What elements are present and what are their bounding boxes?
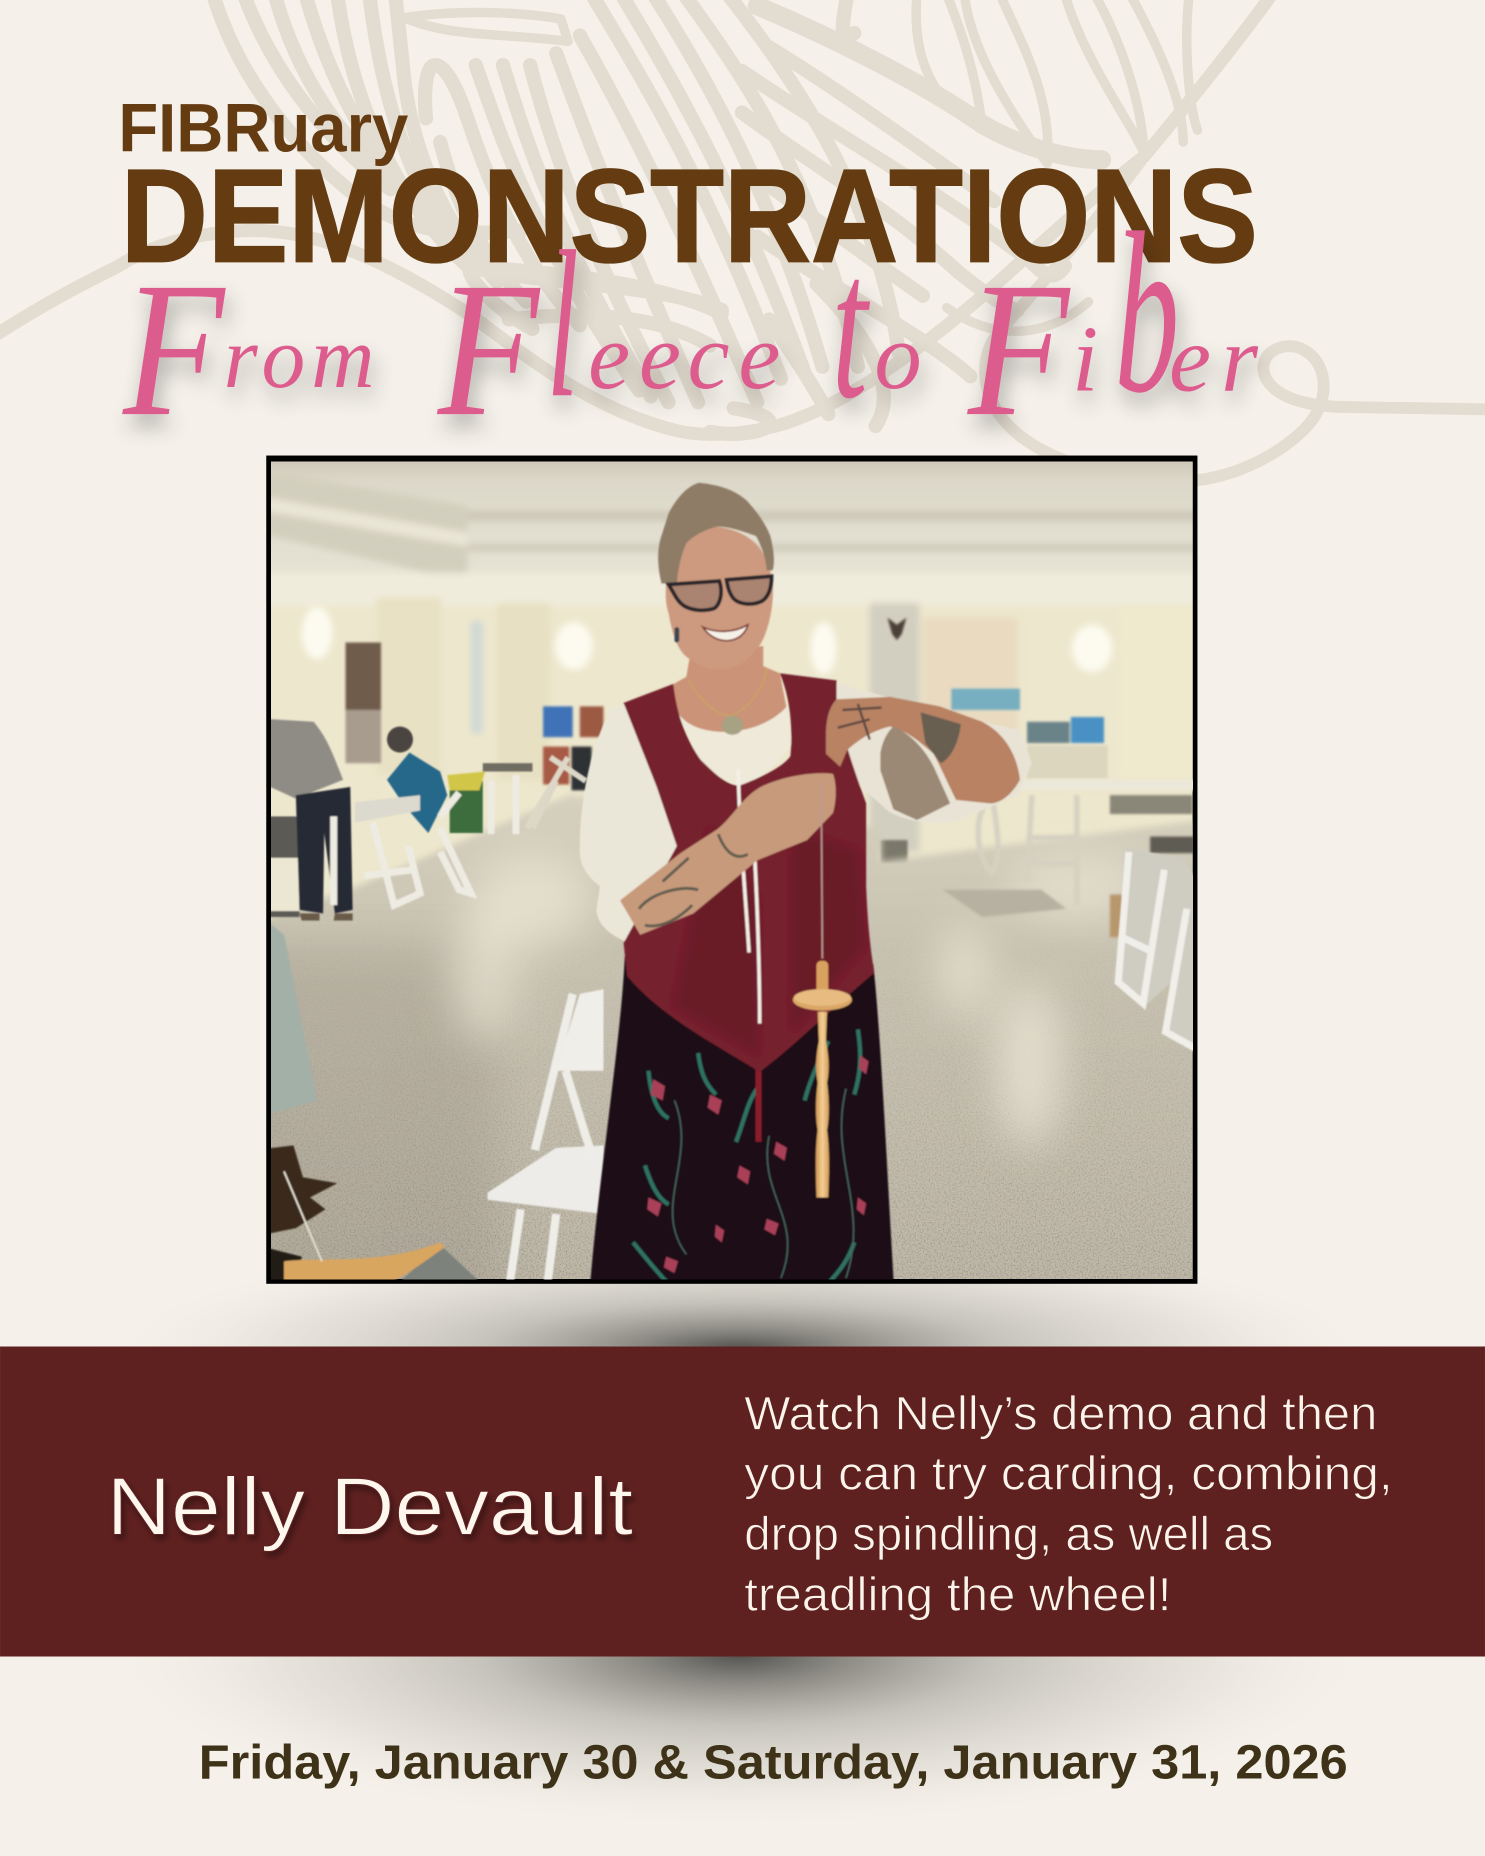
script subtitle: From Fleece to Fiber: F (967, 243, 1071, 456)
skirt with embroidery (589, 956, 895, 1296)
script subtitle: From Fleece to Fiber: F (437, 243, 541, 456)
floor reflections (452, 852, 1148, 1148)
script subtitle: From Fleece to Fiber (122, 186, 1259, 456)
tables at the right (975, 778, 1193, 895)
drop spindle (793, 781, 852, 1197)
people and tables at the left (254, 718, 586, 1118)
script subtitle: From Fleece to Fiber: F (122, 243, 226, 456)
title: FIBRuary: FIBRuary (118, 89, 408, 166)
demo description (744, 1387, 1393, 1621)
head with face and hair (658, 483, 774, 670)
blouse left sleeve (580, 698, 680, 941)
brown box (1108, 893, 1122, 938)
demo description: you can try carding, combing, (744, 1448, 1393, 1501)
banner (0, 1347, 1485, 1657)
necklace (689, 669, 767, 735)
spinning wheel at bottom left (271, 1144, 478, 1280)
floor left darkening (271, 944, 494, 1279)
script subtitle: From Fleece to Fiber: b (1115, 186, 1179, 441)
room walls (271, 461, 1193, 935)
glasses (669, 576, 771, 610)
vest ribbon lace (738, 769, 760, 1023)
demo description: drop spindling, as well as (744, 1508, 1273, 1561)
vest tie cord (756, 1041, 761, 1142)
burgundy vest (624, 673, 874, 1072)
blouse neckline (677, 706, 792, 786)
white folding chair foreground (488, 989, 603, 1290)
person: Nelly Devault (580, 483, 1032, 1296)
yarn ball background illustration (0, 0, 1485, 481)
floor (271, 794, 1193, 1279)
left forearm with tattoos and hand (620, 773, 836, 935)
title: DEMONSTRATIONS: DEMONSTRATIONS (121, 142, 1258, 290)
script subtitle: From Fleece to Fiber: eece (588, 305, 780, 409)
shadow ellipse below banner (95, 1477, 1384, 1832)
right hand, fleece and forearm (826, 697, 1020, 820)
script subtitle: From Fleece to Fiber: i (1072, 307, 1098, 411)
demo description: Watch Nelly’s demo and then (744, 1387, 1377, 1440)
script subtitle: From Fleece to Fiber: rom (224, 309, 374, 406)
room ceiling (271, 462, 1193, 610)
script subtitle: From Fleece to Fiber: o (874, 305, 922, 409)
white folding chairs at the right (1114, 851, 1193, 1052)
chest and neck (670, 646, 787, 740)
floor speckle (271, 973, 1192, 1279)
smile (703, 625, 748, 641)
photo: Nelly Devault demonstrating drop spindle in a hall (271, 462, 1193, 1280)
photo frame (266, 456, 1197, 1284)
shadow ellipse above banner (95, 1231, 1384, 1467)
script subtitle: From Fleece to Fiber: t (832, 212, 871, 442)
speaker name: Nelly Devault (107, 1462, 633, 1553)
wall details: columns, sconces, pictures (302, 598, 1213, 852)
script subtitle: From Fleece to Fiber: er (1169, 307, 1259, 411)
script subtitle: From Fleece to Fiber: l (547, 208, 579, 441)
event dates: Friday, January 30 & Saturday, January 31, 2026 (199, 1735, 1348, 1789)
demo description: treadling the wheel! (744, 1568, 1171, 1621)
floor mat shadow (943, 890, 1066, 917)
blouse right sleeve (828, 680, 1032, 823)
